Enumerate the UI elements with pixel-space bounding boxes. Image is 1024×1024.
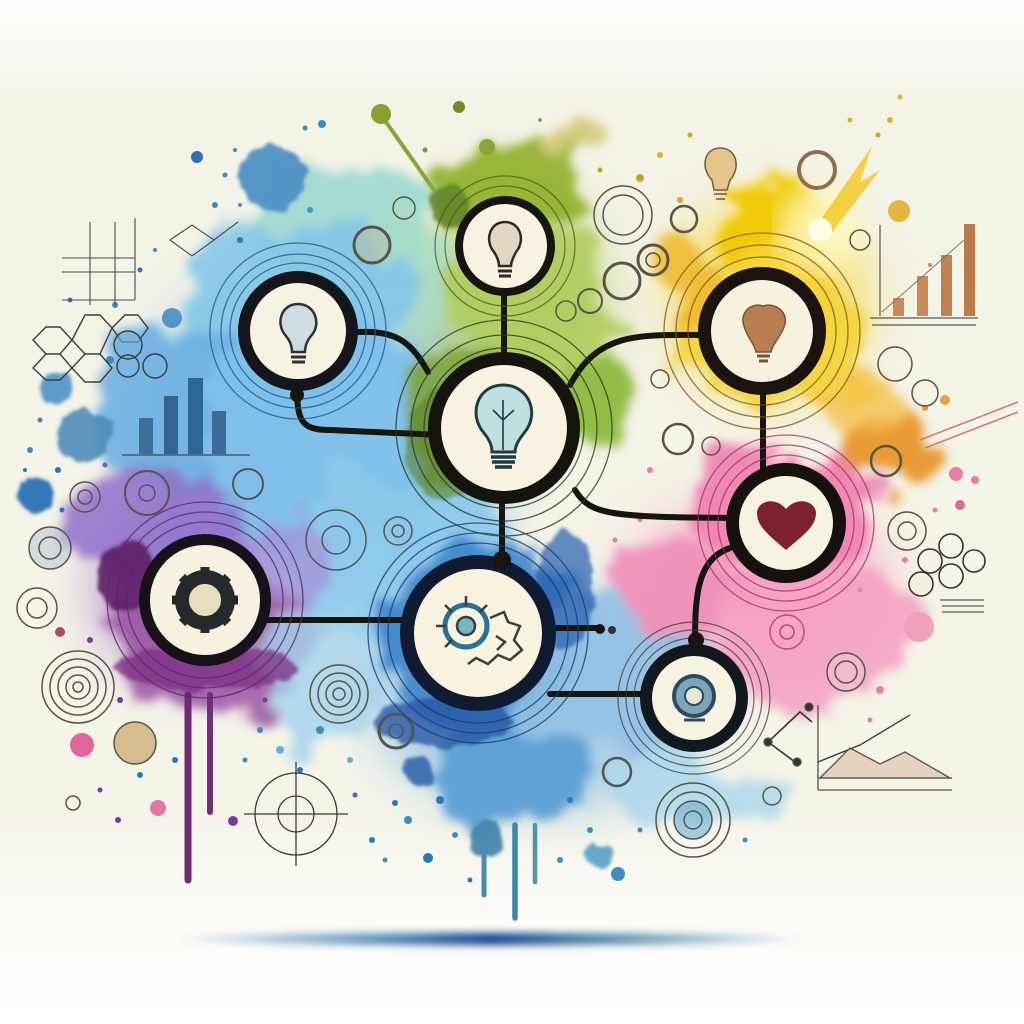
node: upper right warm bulb [664,233,860,429]
icon: lens [674,676,714,720]
node: heart [698,435,874,611]
bar chart: orange bars [870,224,978,325]
floor shadow [170,933,810,945]
sketch: top left grid and network [62,218,238,305]
connector lines [265,290,763,694]
sketch: compass target [244,762,348,866]
node: center bulb [396,320,612,536]
icon: sketch gears [436,596,522,664]
watercolor underlay [90,190,890,810]
icon: light bulb [489,222,521,276]
icon: heart [757,501,816,550]
dark ink blooms [16,145,612,869]
icon: light bulb [280,304,316,362]
node: gear left [107,502,303,698]
connector end dots [290,388,704,648]
decorative outlined circles [17,152,938,857]
bar chart: blue bars [122,378,250,455]
paint drips [188,115,535,918]
icon: gear [172,567,238,633]
sketch: area chart lower right [764,703,952,790]
node: upper left bulb [210,243,386,419]
sunburst glow [780,146,880,270]
watercolor wash: large colour blobs [65,128,930,830]
icon: warm bulb [743,305,785,361]
sketch: hexagon cluster right [909,534,985,612]
node: small lens [618,622,770,774]
sketch: sunburst bulb [705,148,736,199]
sketch: red pencil strokes [920,402,1018,448]
node: gear center [368,523,588,743]
sketch: honeycomb left [33,315,167,382]
icon: teal bulb [476,385,532,467]
splatter dots [23,94,979,882]
node: top bulb [435,176,575,316]
